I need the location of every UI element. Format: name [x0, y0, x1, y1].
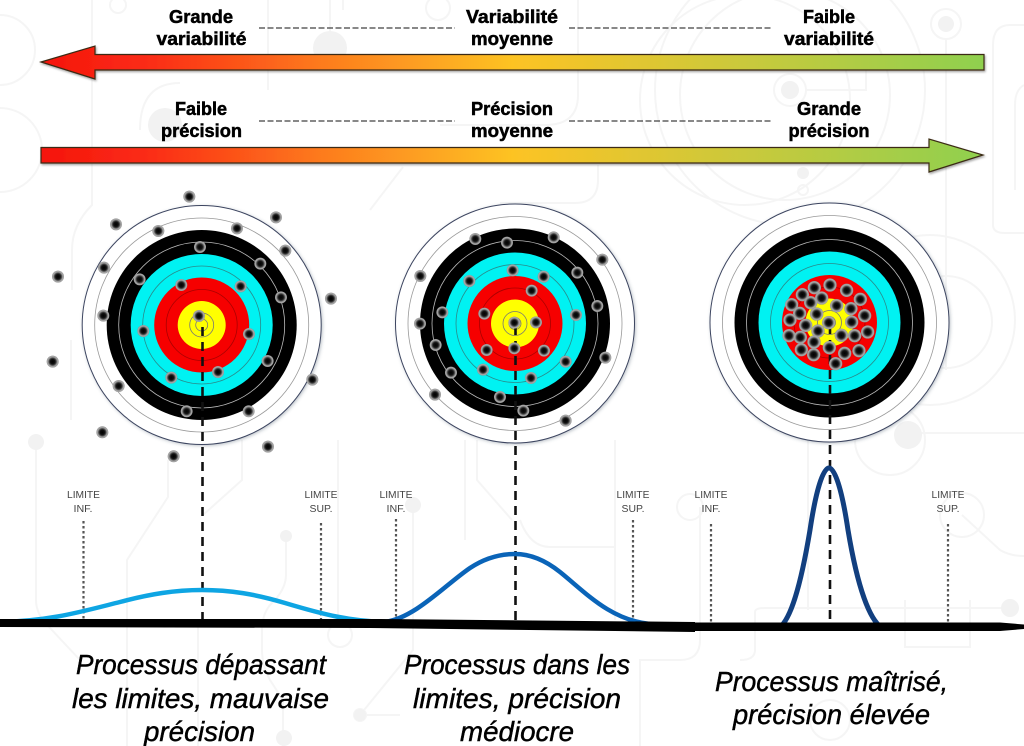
caption: process 3: [715, 666, 948, 730]
bullet holes target 3: [782, 278, 874, 370]
baseline axis: [0, 619, 1024, 632]
target 3: [710, 203, 949, 622]
specification limit labels: LIMITE: [616, 490, 650, 501]
caption: process 1: [72, 649, 329, 746]
variability labels: [156, 7, 874, 49]
precision labels: Grande: [797, 99, 861, 119]
specification limit labels: SUP.: [936, 504, 960, 515]
caption: process 2: limites, précision: [413, 683, 621, 714]
precision labels: [161, 99, 870, 141]
specification limit labels: INF.: [702, 504, 720, 515]
variability arrow: [41, 46, 984, 79]
specification limit labels: INF.: [74, 504, 92, 515]
caption: process 3: précision élevée: [732, 699, 930, 730]
bullet holes target 2: [414, 231, 611, 427]
precision labels: moyenne: [471, 121, 553, 141]
variability labels: Faible: [803, 7, 855, 27]
distribution curve 1: [0, 590, 385, 622]
target 2: [396, 204, 634, 620]
precision labels: Précision: [471, 99, 553, 119]
specification limit labels: LIMITE: [380, 490, 413, 501]
caption: process 3: Processus maîtrisé,: [715, 666, 948, 697]
specification limit labels: LIMITE: [694, 490, 728, 501]
specification limit lines: [84, 519, 948, 624]
specification limit labels: [67, 490, 965, 515]
variability labels: Grande: [169, 7, 233, 27]
variability labels: moyenne: [471, 29, 553, 49]
specification limit labels: LIMITE: [304, 490, 338, 501]
specification limit labels: LIMITE: [932, 490, 965, 501]
variability labels: Variabilité: [466, 7, 558, 27]
target 1: [47, 191, 337, 620]
precision arrow: [41, 139, 983, 172]
caption: process 1: les limites, mauvaise: [72, 683, 329, 714]
precision labels: précision: [161, 121, 242, 141]
caption: process 2: [404, 649, 630, 746]
specification limit labels: LIMITE: [67, 490, 100, 501]
bullet holes target 1: [47, 191, 337, 462]
specification limit labels: SUP.: [622, 504, 644, 515]
caption: process 2: Processus dans les: [404, 649, 630, 680]
precision labels: Faible: [175, 99, 227, 119]
precision labels: précision: [788, 121, 870, 141]
distribution curve 2: [385, 554, 650, 624]
specification limit labels: SUP.: [310, 504, 332, 515]
specification limit labels: INF.: [386, 504, 406, 515]
dashed scale connectors: [259, 28, 773, 121]
variability labels: variabilité: [784, 29, 874, 49]
distribution curve 3: [779, 468, 882, 628]
variability labels: variabilité: [156, 29, 246, 49]
caption: process 1: Processus dépassant: [76, 649, 327, 680]
